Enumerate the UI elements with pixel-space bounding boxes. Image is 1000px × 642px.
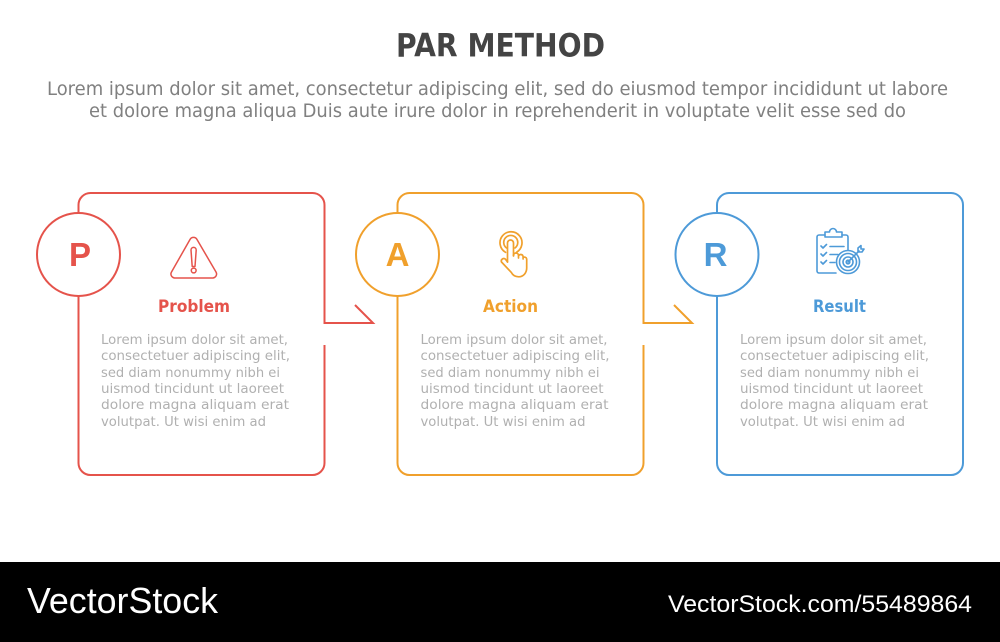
- letter circle: R: R: [704, 236, 728, 273]
- letter circle: A: [356, 213, 439, 296]
- text block: problem: volutpat. Ut wisi enim ad: [101, 414, 266, 430]
- icon: clipboard and target: [817, 229, 864, 274]
- text block: action: Lorem ipsum dolor sit amet,: [420, 332, 608, 348]
- label: result: Result: [813, 297, 866, 317]
- panel: action: [356, 193, 692, 475]
- icon: tapping hand: [500, 232, 527, 277]
- text block: problem: sed diam nonummy nibh ei: [101, 365, 280, 381]
- panel: result: [676, 193, 963, 475]
- label: action: Action: [483, 297, 538, 317]
- text block: result: uismod tincidunt ut laoreet: [740, 381, 923, 397]
- subtitle text block: et dolore magna aliqua Duis aute irure dolor in reprehenderit in voluptate velit esse sed do: [89, 100, 906, 122]
- footer logo text: VectorStock: [27, 580, 219, 621]
- text block: action: volutpat. Ut wisi enim ad: [420, 414, 586, 430]
- text block: result: volutpat. Ut wisi enim ad: [740, 414, 905, 430]
- text block: action: consectetuer adipiscing elit,: [420, 348, 610, 364]
- text block: action: dolore magna aliquam erat: [420, 397, 608, 413]
- text block: result: dolore magna aliquam erat: [740, 397, 928, 413]
- icon: warning triangle: [171, 237, 217, 278]
- text block: problem: dolore magna aliquam erat: [101, 397, 289, 413]
- panel: problem: [37, 193, 373, 475]
- subtitle text block: [47, 78, 948, 122]
- footer bar: [0, 562, 1000, 642]
- letter circle: P: [37, 213, 120, 296]
- text block: problem: [101, 332, 290, 430]
- box outline with arrow: action: [398, 193, 692, 475]
- text block: problem: Lorem ipsum dolor sit amet,: [101, 332, 288, 348]
- box outline: result: [717, 193, 963, 475]
- text block: action: uismod tincidunt ut laoreet: [420, 381, 604, 397]
- letter circle: P: P: [69, 236, 91, 273]
- subtitle text block: Lorem ipsum dolor sit amet, consectetur adipiscing elit, sed do eiusmod tempor incididunt ut labore: [47, 78, 948, 100]
- text block: action: [420, 332, 610, 430]
- text block: result: [740, 332, 929, 430]
- text block: result: consectetuer adipiscing elit,: [740, 348, 929, 364]
- letter circle: A: A: [386, 236, 409, 273]
- text block: action: sed diam nonummy nibh ei: [420, 365, 600, 381]
- text block: result: Lorem ipsum dolor sit amet,: [740, 332, 927, 348]
- text block: problem: consectetuer adipiscing elit,: [101, 348, 290, 364]
- label: problem: Problem: [158, 297, 230, 317]
- footer url text: VectorStock.com/55489864: [668, 591, 972, 618]
- text block: problem: uismod tincidunt ut laoreet: [101, 381, 284, 397]
- title: PAR METHOD: [396, 26, 605, 64]
- letter circle: R: [676, 213, 758, 296]
- box outline with arrow: problem: [78, 193, 373, 475]
- text block: result: sed diam nonummy nibh ei: [740, 365, 919, 381]
